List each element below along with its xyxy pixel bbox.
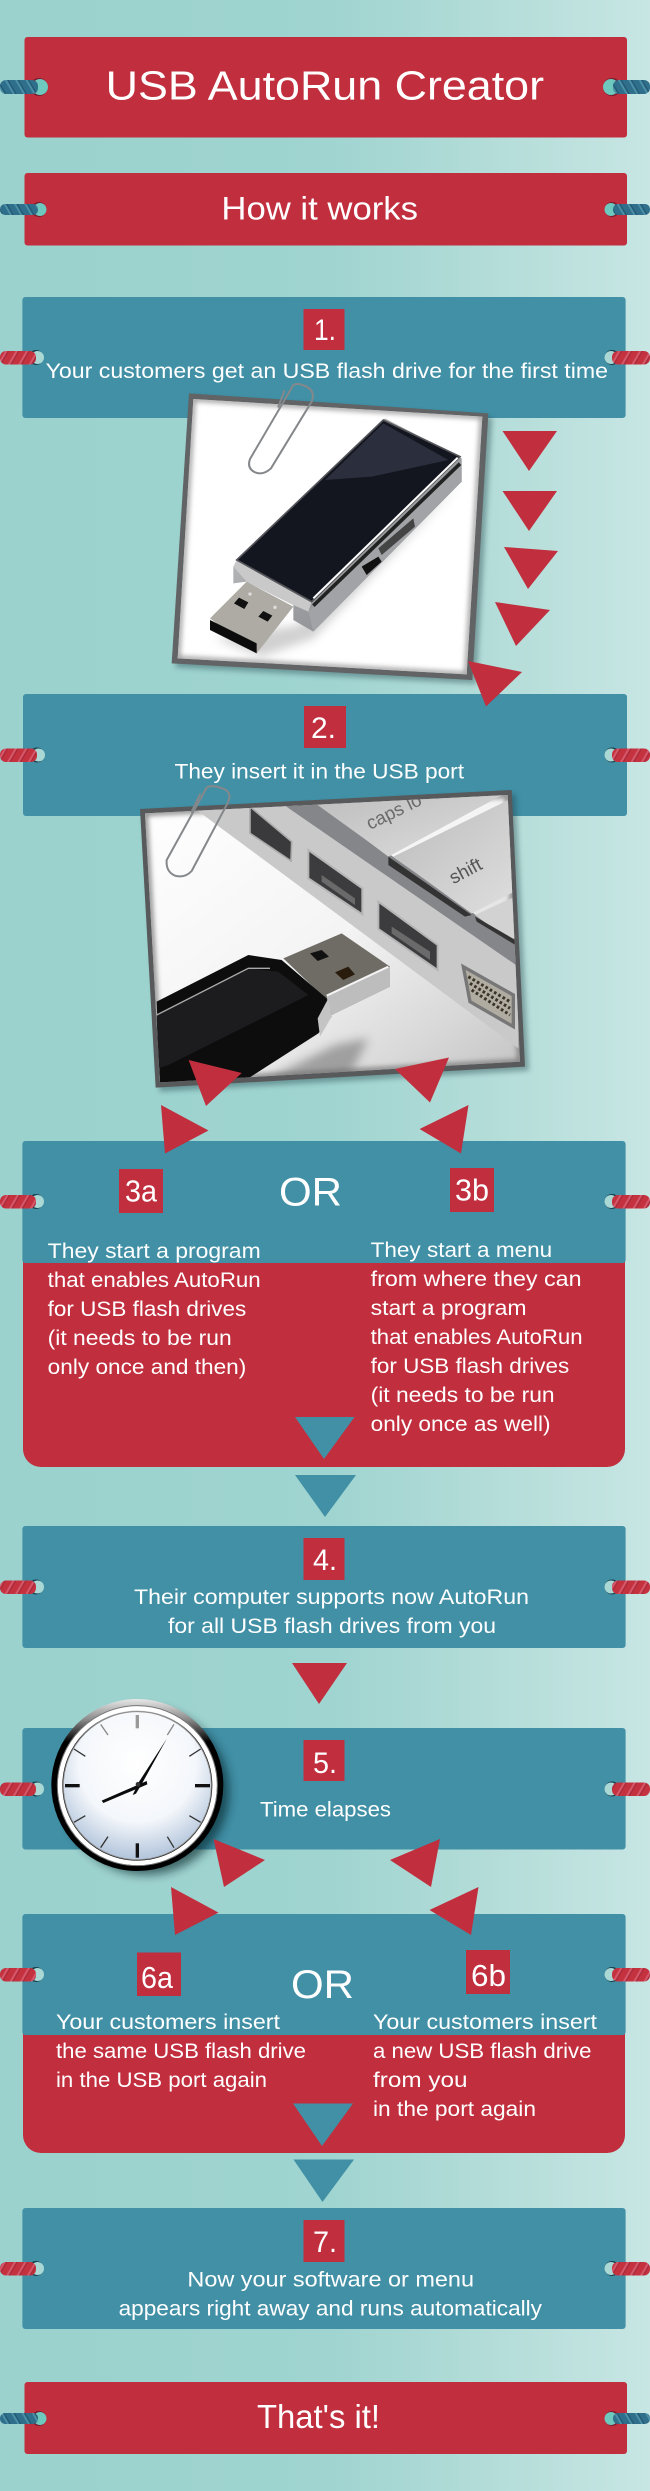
badge 4: 4. [313,1544,337,1577]
badge 6b [466,1950,510,1994]
icon: paperclip [249,384,313,473]
text 3b: from where they can [371,1268,582,1291]
panel: step 7 [0,2208,650,2329]
text 3b: that enables AutoRun [371,1326,583,1349]
step 2 text: They insert it in the USB port [174,760,464,784]
step 4 text [134,1586,529,1638]
panel: step 2 [0,694,650,816]
text 6a: in the USB port again [56,2069,267,2092]
arrow: down to step 2, part 4 [495,602,550,646]
badge 2 [304,706,346,748]
photo: USB flash drive [172,384,492,684]
badge 7 [304,2220,344,2262]
arrow: down to step 2, part 5 [468,661,522,706]
subtitle text: How it works [221,191,418,227]
text 3a: (it needs to be run [48,1327,232,1350]
closing text: That's it! [257,2398,380,2435]
red lower part [23,2025,625,2153]
arrow: to 6b lower [430,1887,478,1935]
arrow: to 6a upper [214,1839,265,1887]
arrow: teal down inside step 3 [295,1417,354,1459]
step 7 text [119,2269,543,2321]
teal upper part [22,1914,626,2035]
text 6b: a new USB flash drive [373,2040,592,2063]
arrow: down to step 2, part 1 [502,431,557,471]
text 3a: only once and then) [48,1356,246,1379]
badge 3a [119,1169,163,1213]
or label: OR [291,1963,354,2007]
badge 7: 7. [313,2226,337,2259]
arrow: to 3b upper [395,1058,449,1102]
badge 6a: 6a [141,1960,174,1995]
step 1 text: Your customers get an USB flash drive for the first time [46,360,608,383]
badge 5 [304,1740,344,1781]
badge 2: 2. [311,712,336,745]
arrow: to 3b lower [420,1105,468,1154]
arrow: to 3a upper [189,1060,242,1106]
text 6b: from you [373,2069,468,2092]
step 5 text: Time elapses [260,1798,391,1822]
arrow: to 6b upper [390,1839,440,1887]
panel: step 1 [0,297,650,418]
step 4 text: for all USB flash drives from you [168,1615,496,1638]
text 3a: They start a program [48,1240,261,1263]
badge 6a [137,1952,181,1996]
text 6a [56,2011,306,2092]
red lower part [23,1250,625,1467]
badge 3a: 3a [125,1174,158,1208]
arrow: to 3a lower [161,1105,208,1154]
or label: OR [279,1170,342,1214]
closing banner [0,2382,650,2454]
text 6a: the same USB flash drive [56,2040,306,2063]
title banner [0,37,650,138]
badge 3b: 3b [455,1172,489,1208]
icon: wall clock [51,1699,229,1875]
photo: inserting the drive into a laptop port: shift [445,853,486,888]
panel: step 5 [0,1728,650,1850]
subtitle banner: how it works [0,173,650,246]
arrow: to 6a lower [171,1887,218,1935]
text 3b [371,1239,583,1436]
badge 3b [450,1168,494,1212]
badge 1 [304,309,344,350]
arrow: teal down to step 7 [294,2160,354,2202]
arrow: down to step 2, part 3 [504,547,558,589]
text 6b: in the port again [373,2098,536,2121]
arrow: teal down to step 4 [295,1475,356,1517]
title text: USB AutoRun Creator [106,63,544,109]
text 3b: (it needs to be run [371,1384,555,1407]
photo: inserting the drive into a laptop port: caps lo [363,789,425,834]
text 6b [373,2011,597,2121]
badge 4 [304,1538,344,1580]
icon: paperclip [167,786,229,876]
text 3b: only once as well) [371,1413,551,1436]
text 3b: start a program [371,1297,527,1320]
text 3a [48,1240,261,1379]
badge 6b: 6b [471,1958,506,1993]
text 3a: for USB flash drives [48,1298,246,1321]
step 7 text: Now your software or menu [187,2269,474,2292]
arrow: teal down inside step 6 [293,2104,353,2146]
badge 1: 1. [314,314,336,347]
panel: step 6 options [0,1914,650,2153]
badge 5: 5. [313,1747,337,1780]
arrow: down to step 2, part 2 [502,491,557,531]
arrow: down to step 5 [292,1663,347,1704]
photo: inserting the drive into a laptop port [140,786,529,1092]
panel: step 4 [0,1526,650,1648]
panel: step 3 options [0,1141,650,1467]
text 6b: Your customers insert [373,2011,597,2034]
teal upper part [22,1141,626,1263]
text 3a: that enables AutoRun [48,1269,261,1292]
text 3b: for USB flash drives [371,1355,569,1378]
text 3b: They start a menu [371,1239,552,1262]
text 6a: Your customers insert [56,2011,280,2034]
step 4 text: Their computer supports now AutoRun [134,1586,529,1609]
step 7 text: appears right away and runs automatically [119,2298,543,2321]
